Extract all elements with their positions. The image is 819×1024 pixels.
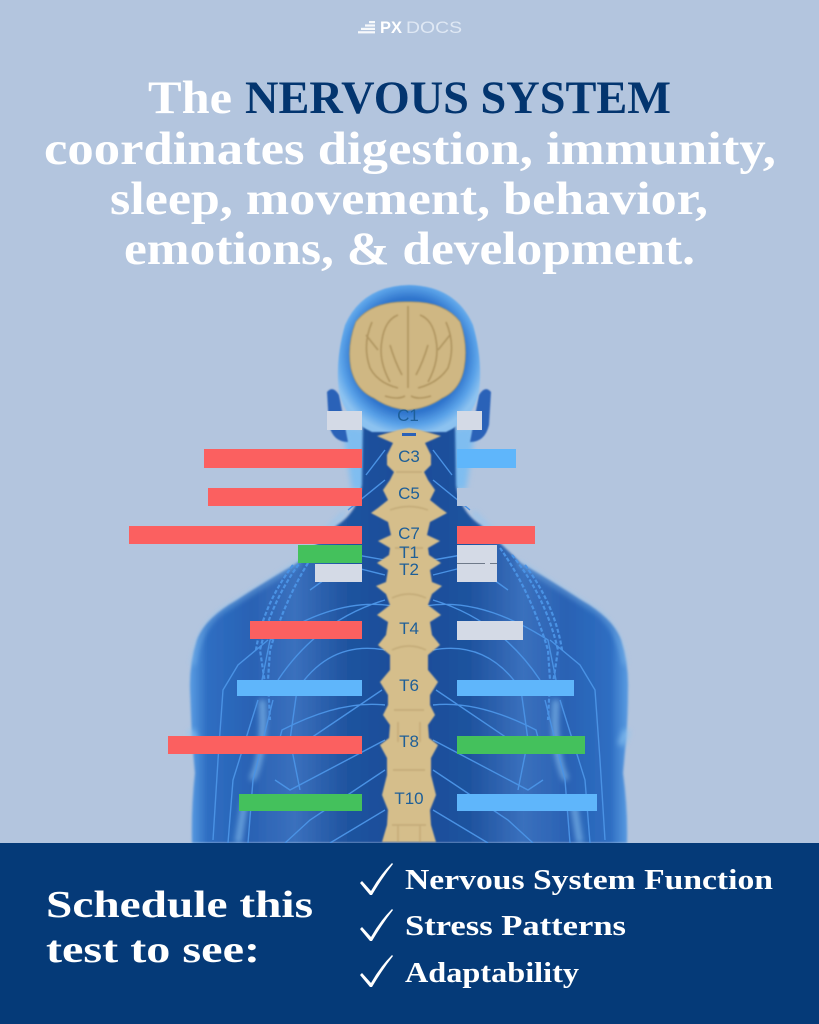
- title: NERVOUS SYSTEM: [245, 72, 671, 124]
- title: The: [148, 72, 232, 124]
- logo: PX DOCS: PX: [380, 18, 403, 37]
- checklist: [360, 863, 773, 989]
- logo: PX DOCS: DOCS: [406, 18, 462, 37]
- vertebra labels: C1: [397, 406, 419, 425]
- left scan bars: [129, 411, 362, 811]
- brain: [350, 302, 465, 410]
- checklist labels: [405, 865, 773, 989]
- title: [44, 72, 776, 275]
- vertebra labels: T2: [399, 560, 419, 579]
- anatomy figure: body, brain and spine: [190, 285, 628, 843]
- neck glow: [342, 425, 476, 490]
- vertebra labels: T4: [399, 619, 419, 638]
- torso silhouette: [190, 420, 628, 843]
- call to action: test to see:: [46, 929, 260, 971]
- checklist labels: Nervous System Function: [405, 865, 773, 896]
- vertebra labels: T8: [399, 732, 419, 751]
- vertebra labels: C3: [398, 447, 420, 466]
- call to action: Schedule this: [46, 884, 313, 926]
- spine: [371, 428, 447, 842]
- vertebra labels: C7: [398, 524, 420, 543]
- vertebra labels: T10: [394, 789, 424, 808]
- ears: [327, 389, 491, 442]
- right scan bars: [457, 411, 597, 811]
- vertebra labels: T6: [399, 676, 419, 695]
- spine shading: [390, 472, 428, 842]
- vertebra labels: C5: [398, 484, 420, 503]
- shoulder and arm highlights: [191, 512, 627, 843]
- nerve branches: [213, 410, 605, 843]
- dark notch in top vertebra: [402, 433, 416, 436]
- footer panel: [0, 843, 819, 1024]
- title: emotions, & development.: [124, 223, 695, 275]
- checklist labels: Stress Patterns: [405, 911, 626, 942]
- vertebra labels: T1: [399, 543, 419, 562]
- title: coordinates digestion, immunity,: [44, 123, 776, 175]
- vertebra labels: [394, 406, 424, 808]
- head: [338, 285, 480, 432]
- logo: PX DOCS: [358, 18, 462, 37]
- title: sleep, movement, behavior,: [110, 173, 708, 225]
- call to action: [46, 884, 313, 971]
- check icons: [360, 863, 393, 987]
- checklist labels: Adaptability: [405, 958, 579, 989]
